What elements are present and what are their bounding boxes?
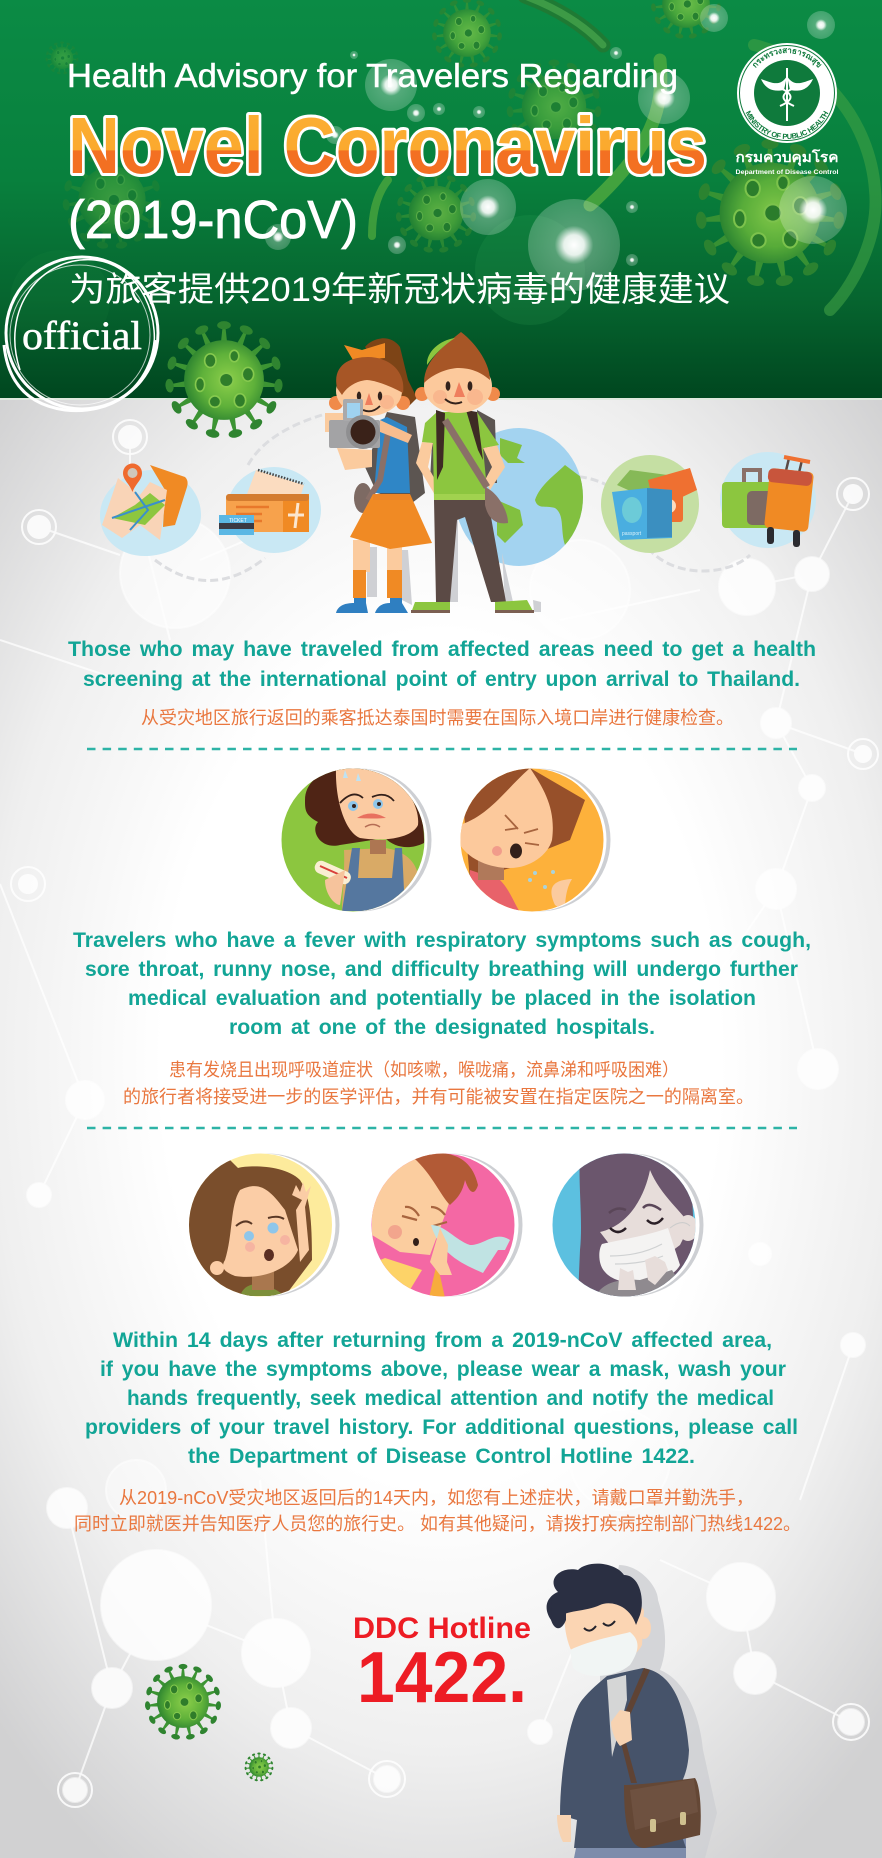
title: 2019-nCoV: (2019-nCoV) xyxy=(68,190,358,250)
official stamp: official xyxy=(22,313,142,358)
icon: virus bottom left xyxy=(145,1664,221,1740)
banner xyxy=(0,0,882,400)
text: fever symptoms Chinese: 患有发烧且出现呼吸道症状（如咳嗽，喉咙痛，流鼻涕和呼吸困难） xyxy=(169,1060,679,1080)
logo: Department of Disease Control seal xyxy=(736,43,839,176)
icon: passport and money xyxy=(601,455,699,553)
text: entry screening English: screening at the international point of entry upon arrival to Thailand. xyxy=(83,667,800,691)
banner bubbles xyxy=(265,4,847,291)
text: entry screening English xyxy=(68,637,816,691)
icon: woman wearing mask xyxy=(552,1153,704,1298)
background molecule network xyxy=(0,420,878,1807)
text: fever symptoms Chinese: 的旅行者将接受进一步的医学评估，并有可能被安置在指定医院之一的隔离室。 xyxy=(123,1087,754,1107)
text: within 14 days Chinese: 同时立即就医并告知医疗人员您的旅行史。 如有其他疑问，请拨打疾病控制部门热线1422。 xyxy=(74,1514,801,1534)
text: within 14 days English: Within 14 days after returning from a 2019-nCoV affected area, xyxy=(113,1328,772,1352)
text: fever symptoms English: medical evaluation and potentially be placed in the isolation xyxy=(128,986,756,1010)
text: within 14 days English: providers of your travel history. For additional questions, please call xyxy=(85,1415,798,1439)
text: entry screening Chinese: 从受灾地区旅行返回的乘客抵达泰国时需要在国际入境口岸进行健康检查。 xyxy=(141,708,734,728)
title: Chinese: 为旅客提供2019年新冠状病毒的健康建议 xyxy=(69,271,730,309)
text: fever symptoms English: room at one of the designated hospitals. xyxy=(229,1015,655,1039)
icon: girl with fever xyxy=(280,765,432,913)
text: within 14 days English: if you have the symptoms above, please wear a mask, wash your xyxy=(100,1357,787,1381)
text: fever symptoms English: sore throat, runny nose, and difficulty breathing will undergo further xyxy=(85,957,799,981)
icon: map xyxy=(100,464,201,556)
text: fever symptoms English: Travelers who have a fever with respiratory symptoms such as cough, xyxy=(73,928,811,952)
dashed travel arcs xyxy=(155,415,750,581)
text: entry screening English: Those who may have traveled from affected areas need to get a health xyxy=(68,637,816,661)
logo: Department of Disease Control seal: MINISTRY OF PUBLIC HEALTH xyxy=(746,110,828,139)
illustration: globe xyxy=(455,428,585,566)
banner bacteria rods xyxy=(372,0,876,310)
icon: luggage xyxy=(720,452,816,548)
text: within 14 days English: hands frequently, seek medical attention and notify the medical xyxy=(127,1386,774,1410)
illustration: boy traveler xyxy=(411,332,541,613)
icon: sneezing child xyxy=(371,1153,522,1298)
text: fever symptoms English xyxy=(73,928,811,1039)
icon: coughing girl xyxy=(460,768,610,913)
icon: ticket xyxy=(219,467,321,553)
hotline: 1422. xyxy=(357,1638,527,1718)
logo: Department of Disease Control seal: กระทรวงสาธารณสุข xyxy=(753,48,822,68)
logo: Department of Disease Control seal: กรมควบคุมโรค xyxy=(736,148,838,166)
illustration: man with mask xyxy=(547,1564,717,1858)
banner viruses xyxy=(10,0,845,350)
text: fever symptoms Chinese xyxy=(123,1060,754,1107)
icon: passport and money: passport xyxy=(622,531,642,537)
hotline: DDC Hotline xyxy=(353,1612,531,1645)
text: within 14 days English xyxy=(85,1328,798,1468)
illustration: girl traveler xyxy=(325,338,432,613)
icon: small virus xyxy=(244,1753,274,1781)
icon: ticket: TICKET xyxy=(229,518,247,524)
text: within 14 days English: the Department of Disease Control Hotline 1422. xyxy=(188,1444,695,1468)
icon: large virus xyxy=(165,321,283,439)
logo: Department of Disease Control seal: Department of Disease Control xyxy=(736,169,839,176)
text: within 14 days Chinese: 从2019-nCoV受灾地区返回后的14天内，如您有上述症状，请戴口罩并勤洗手， xyxy=(119,1488,754,1508)
icon: girl with fever headache xyxy=(188,1153,340,1298)
text: within 14 days Chinese xyxy=(74,1488,801,1534)
official stamp xyxy=(4,257,158,411)
title: Novel Coronavirus: Novel Coronavirus xyxy=(68,101,707,190)
title line: Health Advisory: Health Advisory for Travelers Regarding xyxy=(67,57,678,94)
